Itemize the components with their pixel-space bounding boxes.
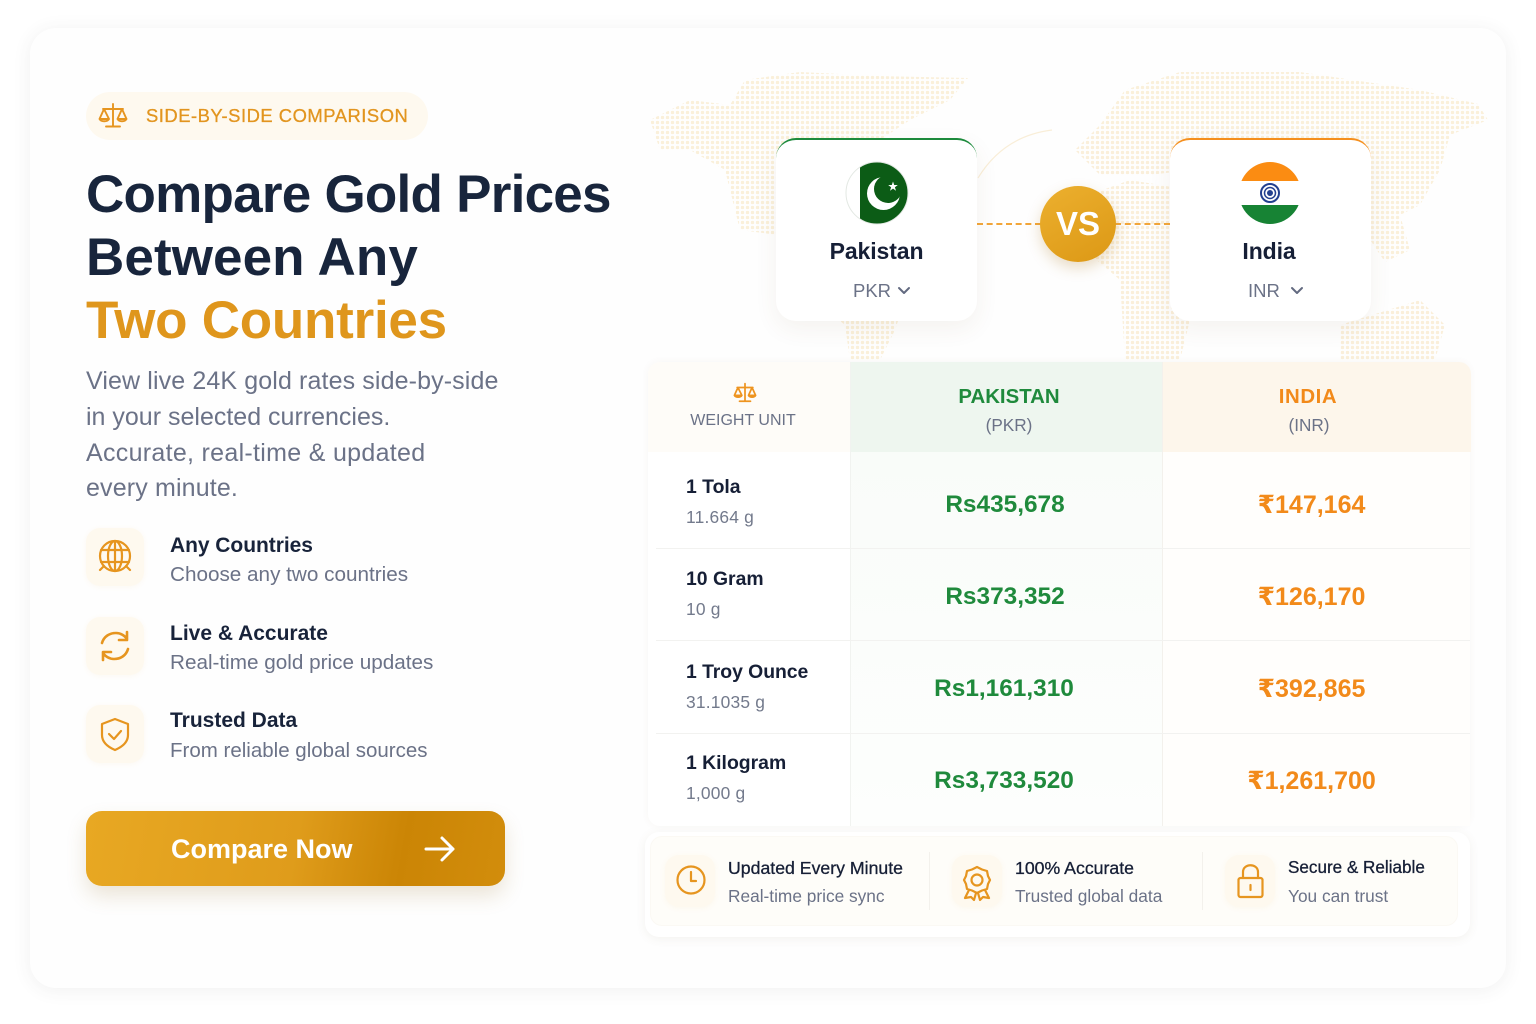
row label: 1 troy ounce	[686, 661, 808, 712]
vs badge	[1040, 186, 1116, 262]
header: india	[1163, 362, 1471, 452]
flag: pakistan	[846, 162, 908, 224]
header: pakistan: (PKR)	[986, 415, 1032, 435]
column: pakistan: Rs435,678	[945, 490, 1065, 518]
column background: weight header	[648, 362, 850, 452]
column: india: ₹392,865	[1258, 674, 1365, 702]
row label: 1 troy ounce: 31.1035 g	[686, 692, 765, 712]
feature: trusted data: Trusted Data	[170, 709, 297, 732]
header: india: INDIA	[1279, 386, 1337, 408]
icon: scales	[734, 382, 756, 402]
title	[86, 165, 611, 350]
connector line right	[1115, 223, 1170, 225]
column: india: ₹1,261,700	[1247, 766, 1376, 794]
icon: award	[952, 855, 1002, 907]
row label: 1 kilogram	[686, 752, 786, 803]
vs badge: VS	[1056, 205, 1100, 242]
column: pakistan: Rs3,733,520	[934, 766, 1074, 794]
comparison table	[648, 362, 1470, 826]
feature: trusted data: From reliable global sources	[170, 739, 428, 762]
description text: View live 24K gold rates side-by-side	[86, 367, 499, 395]
card: pakistan: PKR	[853, 280, 891, 301]
column: india: ₹126,170	[1258, 582, 1365, 610]
row label: 1 tola	[686, 476, 754, 527]
item: 100% accurate: 100% Accurate	[1015, 858, 1134, 878]
badge text: SIDE-BY-SIDE COMPARISON	[146, 105, 408, 126]
flag: india	[1241, 162, 1299, 224]
button: compare now	[86, 811, 505, 886]
card: pakistan: Pakistan	[830, 238, 923, 264]
description text: in your selected currencies.	[86, 403, 390, 431]
item: updated every minute: Real-time price sync	[728, 886, 885, 906]
column background: weight header: WEIGHT UNIT	[690, 412, 796, 429]
item: secure and reliable	[1225, 855, 1425, 907]
item: updated every minute: Updated Every Minute	[728, 858, 903, 878]
column: india	[1162, 362, 1470, 826]
header: india: (INR)	[1288, 415, 1330, 435]
title: Between Any	[86, 228, 418, 287]
card: pakistan	[776, 138, 977, 321]
icon: chevron	[1291, 287, 1303, 294]
header: pakistan: PAKISTAN	[958, 386, 1060, 408]
button: compare now: Compare Now	[171, 834, 353, 864]
item: 100% accurate: Trusted global data	[1015, 886, 1162, 906]
card: india: INR	[1248, 280, 1280, 301]
column: india: ₹147,164	[1258, 490, 1365, 518]
title: Compare Gold Prices	[86, 165, 611, 224]
row label: 10 gram	[686, 568, 764, 619]
footer inner panel	[650, 836, 1458, 926]
icon: arrow	[424, 836, 455, 862]
footer strip	[645, 832, 1470, 937]
title: Two Countries	[86, 291, 447, 350]
item: secure and reliable: Secure & Reliable	[1288, 858, 1425, 877]
icon: refresh	[86, 617, 144, 675]
row label: 10 gram: 10 Gram	[686, 568, 764, 590]
column: pakistan: Rs373,352	[945, 582, 1065, 610]
description text: every minute.	[86, 474, 238, 502]
icon: chevron	[898, 287, 910, 294]
column: pakistan: Rs1,161,310	[934, 674, 1074, 702]
feature: trusted data	[86, 705, 428, 763]
card: india: India	[1242, 238, 1296, 264]
feature: any countries: Choose any two countries	[170, 563, 408, 586]
feature: live and accurate	[86, 617, 433, 675]
row label: 1 kilogram: 1 Kilogram	[686, 752, 786, 774]
icon: clock	[665, 855, 715, 907]
connector line left	[977, 223, 1041, 225]
row label: 1 troy ounce: 1 Troy Ounce	[686, 661, 808, 683]
description text: Accurate, real-time & updated	[86, 439, 425, 467]
feature: live and accurate: Live & Accurate	[170, 622, 328, 645]
item: updated every minute	[665, 855, 903, 907]
icon: shield	[86, 705, 144, 763]
column: pakistan	[850, 362, 1162, 826]
feature: any countries	[86, 528, 408, 586]
item: secure and reliable: You can trust	[1288, 886, 1388, 906]
badge: side-by-side comparison	[86, 92, 428, 140]
icon: lock	[1225, 855, 1275, 907]
header: pakistan	[851, 362, 1163, 452]
card: india	[1170, 138, 1371, 321]
icon: scales	[98, 103, 128, 128]
row label: 1 tola: 11.664 g	[686, 507, 754, 527]
feature: any countries: Any Countries	[170, 534, 313, 557]
description text	[86, 367, 499, 502]
row label: 1 kilogram: 1,000 g	[686, 783, 745, 803]
icon: globe	[86, 528, 144, 586]
world map background	[651, 72, 1488, 360]
row label: 1 tola: 1 Tola	[686, 476, 741, 498]
row label: 10 gram: 10 g	[686, 599, 721, 619]
feature: live and accurate: Real-time gold price updates	[170, 651, 433, 674]
item: 100% accurate	[952, 855, 1162, 907]
